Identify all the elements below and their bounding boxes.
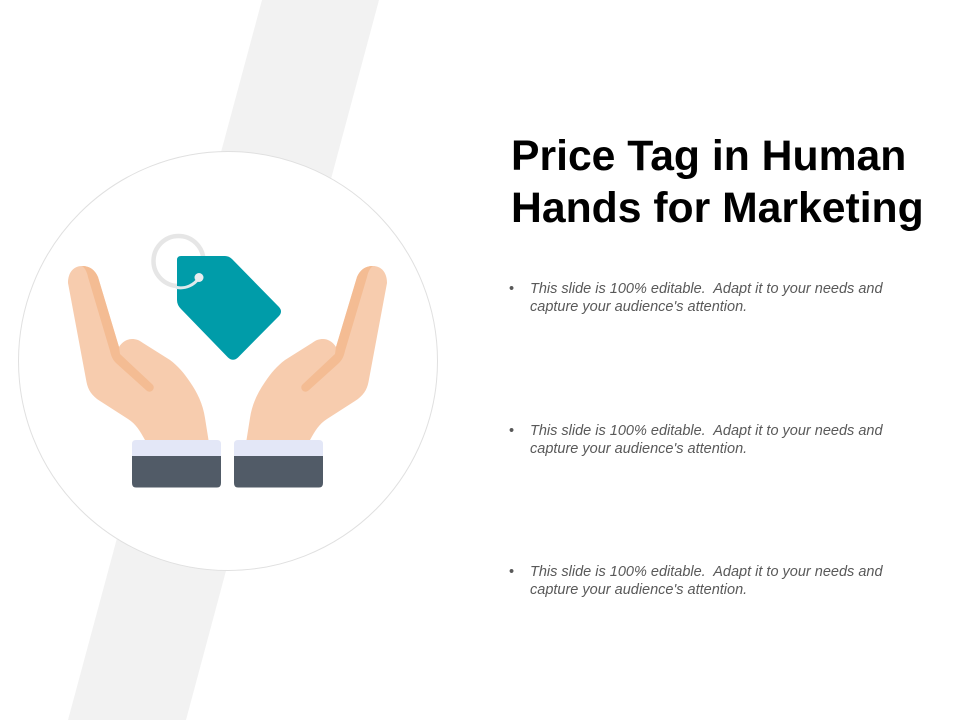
bullet text 3: •	[509, 564, 514, 580]
title: Hands for Marketing	[511, 184, 924, 232]
diagonal background band	[68, 0, 379, 720]
icon: right hand with cuff	[234, 266, 387, 488]
bullet text 1: This slide is 100% editable. Adapt it to your needs and capture your audience's attention.	[530, 281, 883, 315]
icon: left hand with cuff	[68, 266, 221, 488]
title	[511, 132, 924, 232]
bullet text 3: This slide is 100% editable. Adapt it to your needs and capture your audience's attention.	[530, 564, 883, 598]
circle panel	[18, 152, 438, 570]
bullet text 1: •	[509, 281, 514, 297]
bullet text 2: This slide is 100% editable. Adapt it to your needs and capture your audience's attention.	[530, 423, 883, 457]
title: Price Tag in Human	[511, 132, 906, 180]
bullet text 2: •	[509, 423, 514, 439]
icon: price tag with ring	[154, 236, 281, 360]
